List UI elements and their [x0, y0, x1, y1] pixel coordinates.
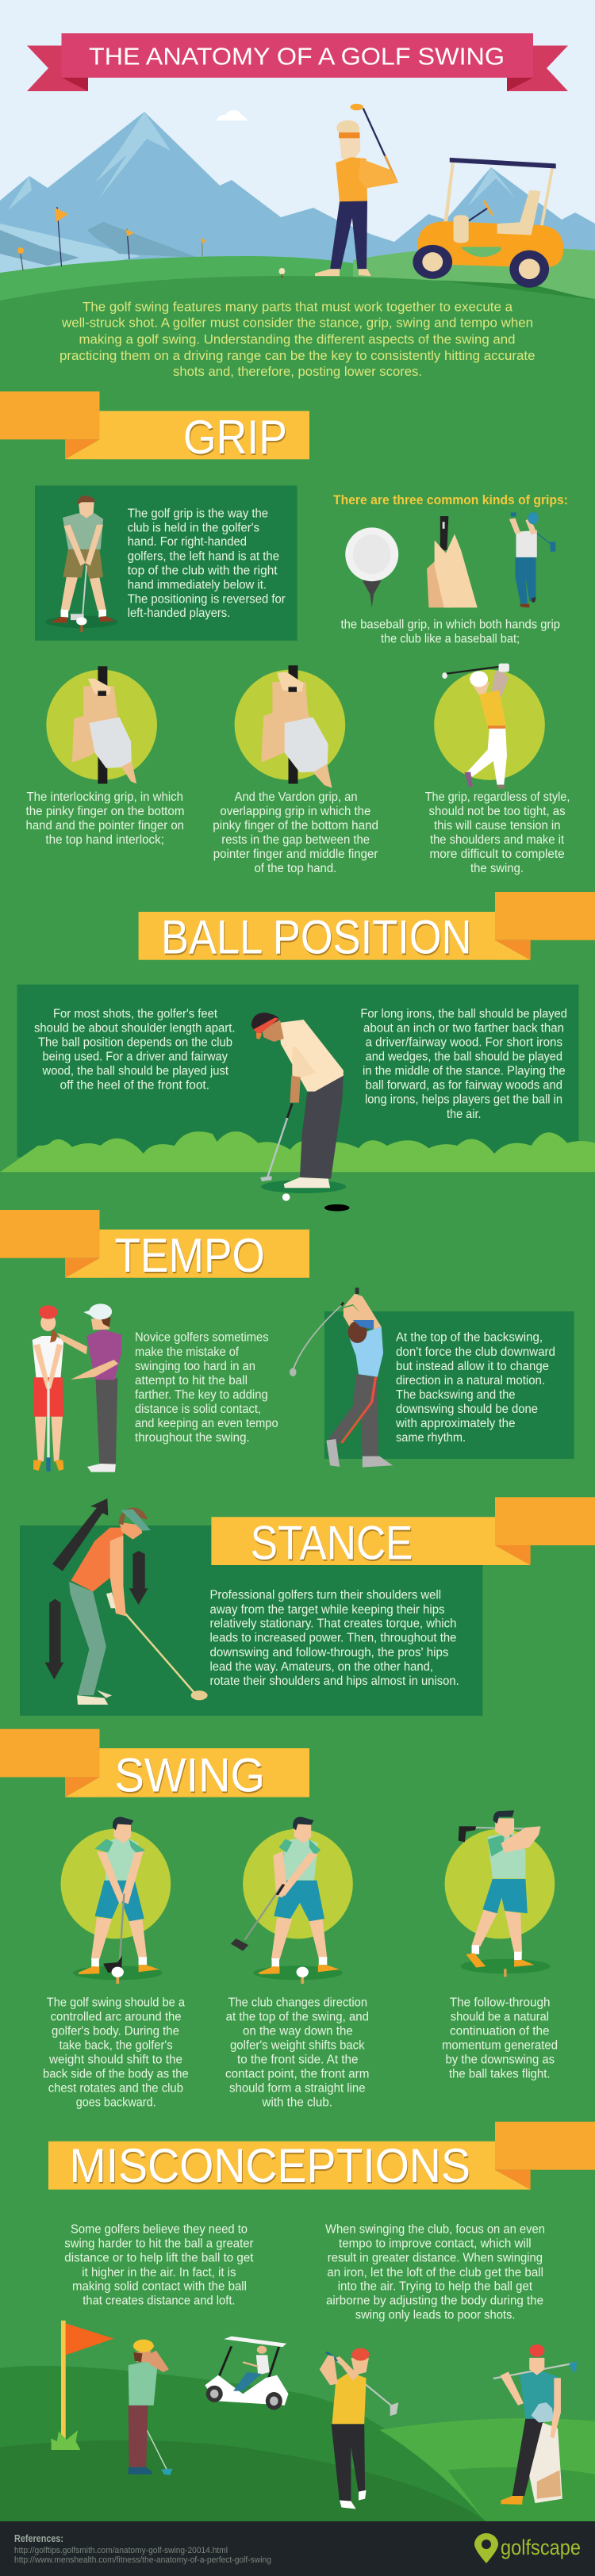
panel: tempo backswing: [324, 1311, 574, 1459]
text: misconceptions right: tempo to improve contact, which will: [339, 2237, 532, 2250]
text: swing stage 1: take back, the golfer's: [60, 2039, 173, 2053]
text: misconceptions right: into the air. Trying to help the ball get: [338, 2280, 533, 2294]
illustration: golfer at top of backswing: [290, 1288, 393, 1468]
text: misconceptions left: [64, 2222, 254, 2308]
text: interlocking grip: hand and the pointer finger on: [25, 819, 184, 833]
text: ball position left: [34, 1007, 235, 1093]
text: grip tension: more difficult to complete: [430, 848, 565, 861]
illustration: instructor and student: [33, 1303, 121, 1472]
text: tempo left: make the mistake of: [135, 1345, 240, 1359]
text: ball position right: ball forward, as for fairway woods and: [366, 1079, 562, 1093]
text: swing stage 1: controlled arc around the: [51, 2011, 182, 2024]
section header: stance: STANCE: [251, 1517, 413, 1570]
text: grip tension: the swing.: [470, 862, 524, 875]
text: swing stage 3: the ball takes flight.: [449, 2068, 551, 2081]
text: ball position left: wood, the ball should be played just: [42, 1065, 229, 1078]
text: tempo right: At the top of the backswing,: [396, 1331, 543, 1345]
grip definition text: The golf grip is the way the: [128, 507, 268, 520]
text: misconceptions right: result in greater distance. When swinging: [328, 2252, 543, 2265]
section header: tempo: TEMPO: [114, 1229, 265, 1282]
grip definition text: [128, 507, 286, 620]
text: ball position right: and wedges, the ball should be played: [366, 1051, 562, 1064]
text: misconceptions right: When swinging the club, focus on an even: [325, 2222, 545, 2236]
text: tempo left: and keeping an even tempo: [135, 1417, 278, 1430]
arrow: shoulder turn: [52, 1499, 108, 1571]
text: Vardon grip: rests in the gap between the: [221, 833, 370, 847]
text: misconceptions left: Some golfers believe they need to: [71, 2222, 248, 2236]
text: tempo right: [395, 1331, 555, 1445]
references: References:: [14, 2532, 63, 2544]
text: ball position right: the air.: [447, 1108, 481, 1121]
text: swing stage 1: The golf swing should be a: [47, 1996, 185, 2010]
section header: tempo: [0, 1210, 309, 1282]
text: misconceptions right: an iron, let the loft of the club get the ball: [327, 2266, 543, 2279]
text: ball position left: The ball position depends on the club: [38, 1035, 232, 1049]
text: stance: downswing and follow-through, the pros' hips: [209, 1646, 449, 1659]
text: tempo left: [135, 1331, 278, 1445]
text: swing stage 3: [442, 1996, 558, 2081]
text: swing stage 2: [225, 1996, 369, 2110]
text: swing stage 3: should be a natural: [451, 2011, 549, 2024]
text: tempo right: don't force the club downward: [396, 1345, 555, 1359]
illustration: swing stage 1 takeaway: [61, 1817, 171, 1984]
text: misconceptions left: making solid contact with the ball: [72, 2280, 247, 2294]
text: swing stage 2: to the front side. At the: [237, 2054, 359, 2067]
cloud: [217, 110, 248, 121]
intro text: The golf swing features many parts that must work together to execute a: [83, 299, 513, 314]
footer: [0, 2521, 595, 2576]
text: swing stage 2: The club changes direction: [228, 1996, 367, 2010]
text: grip tension: the shoulders and make it: [430, 833, 565, 847]
text: stance: rotate their shoulders and hips almost in unison.: [209, 1675, 459, 1688]
text: ball position right: in the middle of the stance. Playing the: [363, 1065, 566, 1078]
text: swing stage 2: golfer's weight shifts back: [230, 2039, 365, 2053]
text: tempo left: swinging too hard in an: [135, 1360, 255, 1373]
text: tempo left: throughout the swing.: [135, 1431, 250, 1445]
illustration: interlocking grip: [46, 666, 157, 784]
text: Vardon grip: [213, 790, 378, 875]
logo: golfscape: golfscape: [501, 2536, 581, 2559]
panel: grip definition: [35, 485, 297, 641]
illustration: putting golfer, ball and hole: [251, 1012, 350, 1211]
grip definition text: club is held in the golfer's: [128, 521, 259, 534]
text: Vardon grip: of the top hand.: [254, 862, 336, 875]
section header: swing: [0, 1729, 309, 1801]
text: ball position left: For most shots, the golfer's feet: [53, 1007, 218, 1020]
intro text: making a golf swing. Understanding the different aspects of the swing and: [79, 331, 516, 346]
text: Vardon grip: overlapping grip in which the: [220, 805, 370, 818]
illustration: golfer in yellow finishing backswing: [320, 2348, 398, 2509]
intro text: practicing them on a driving range can be the key to consistently hitting accurate: [60, 348, 535, 363]
text: tempo right: The backswing and the: [396, 1388, 516, 1402]
icon: baseball grip hand: [427, 516, 478, 607]
text: baseball grip: the baseball grip, in which both hands grip: [341, 618, 560, 631]
text: misconceptions left: it higher in the air. In fact, it is: [82, 2266, 236, 2279]
icon: small golfer in blue: [509, 512, 555, 607]
references: [14, 2532, 271, 2565]
section header: stance: [211, 1497, 595, 1570]
text: tempo right: same rhythm.: [396, 1431, 466, 1445]
illustration: golfer follow-through in yellow: [434, 664, 545, 789]
text: grip tension: this will cause tension in: [434, 819, 560, 833]
text: stance: [209, 1589, 459, 1688]
illustration: golfer addressing ball: [45, 496, 117, 632]
text: baseball grip: [341, 618, 560, 646]
text: tempo left: attempt to hit the ball: [135, 1374, 248, 1388]
hero scene: sky, mountains, hills: [0, 0, 595, 333]
text: ball position left: off the heel of the front foot.: [60, 1079, 209, 1093]
text: tempo right: with approximately the: [395, 1417, 516, 1430]
title ribbon: [27, 33, 568, 91]
text: Vardon grip: pinky finger of the bottom hand: [213, 819, 378, 833]
hills: closing scene: [0, 2366, 595, 2521]
text: ball position left: should be about shoulder length apart.: [34, 1022, 235, 1035]
text: grip tension: should not be too tight, as: [428, 805, 566, 818]
text: swing stage 1: chest rotates and the club: [48, 2082, 183, 2096]
references: http://golftips.golfsmith.com/anatomy-golf-swing-20014.html: [14, 2546, 228, 2555]
text: misconceptions right: swing only leads to poor shots.: [355, 2309, 516, 2321]
text: ball position right: a driver/fairway wood. For short irons: [366, 1035, 562, 1049]
intro text: well-struck shot. A golfer must consider the stance, grip, swing and tempo when: [61, 316, 533, 331]
icon: golf ball on tee: [345, 527, 398, 607]
text: swing stage 2: with the club.: [262, 2096, 332, 2110]
text: misconceptions left: swing harder to hit the ball a greater: [64, 2237, 254, 2250]
text: stance: away from the target while keeping their hips: [209, 1603, 445, 1617]
text: swing stage 2: contact point, the front arm: [225, 2068, 369, 2081]
text: stance: leads to increased power. Then, throughout the: [209, 1632, 456, 1645]
text: tempo left: farther. The key to adding: [135, 1388, 268, 1402]
text: baseball grip: the club like a baseball bat;: [381, 633, 520, 646]
icon: pin flag: [52, 2321, 113, 2450]
grip definition text: top of the club with the right: [128, 564, 278, 577]
section header: misconceptions: MISCONCEPTIONS: [70, 2139, 470, 2192]
text: stance: lead the way. Amateurs, on the other hand,: [209, 1660, 433, 1674]
bushes: [0, 1131, 595, 1172]
illustration: stance golfer with motion arrows: [44, 1499, 208, 1705]
grip definition text: The positioning is reversed for: [128, 592, 286, 606]
subheading: three kinds of grips: There are three common kinds of grips:: [333, 492, 568, 507]
text: stance: relatively stationary. That creates torque, which: [209, 1617, 456, 1631]
text: stance: Professional golfers turn their shoulders well: [209, 1589, 441, 1602]
text: tempo right: direction in a natural motion.: [396, 1374, 545, 1388]
panel: ball position: [0, 985, 595, 1172]
text: ball position left: being used. For a driver and fairway: [43, 1051, 228, 1064]
section header: grip: GRIP: [183, 411, 287, 464]
text: tempo right: downswing should be done: [396, 1403, 538, 1416]
text: interlocking grip: the pinky finger on the bottom: [25, 805, 184, 818]
text: ball position right: about an inch or two farther back than: [363, 1022, 564, 1035]
illustration: golfer with club bag: [493, 2344, 577, 2505]
illustration: swing stage 2 downswing: [231, 1817, 353, 1984]
text: misconceptions left: distance or to help lift the ball to get: [64, 2252, 254, 2265]
text: swing stage 3: The follow-through: [450, 1996, 551, 2010]
text: Vardon grip: pointer finger and middle finger: [213, 848, 378, 861]
text: Vardon grip: And the Vardon grip, an: [235, 790, 358, 804]
illustration: small golf cart with driver: [205, 2337, 289, 2410]
text: swing stage 1: weight should shift to the: [48, 2054, 182, 2067]
section header: swing: SWING: [114, 1748, 265, 1801]
text: swing stage 3: by the downswing as: [446, 2054, 555, 2067]
text: swing stage 1: goes backward.: [76, 2096, 156, 2110]
grip definition text: hand immediately below it.: [128, 579, 267, 591]
grip definition text: golfers, the left hand is at the: [128, 549, 279, 563]
intro text: [60, 299, 535, 379]
references: http://www.menshealth.com/fitness/the-anatomy-of-a-perfect-golf-swing: [14, 2555, 271, 2565]
arrow: down right: [129, 1551, 148, 1605]
panel: stance: [20, 1525, 482, 1716]
text: misconceptions left: that creates distance and loft.: [83, 2295, 235, 2308]
text: swing stage 2: on the way down the: [243, 2025, 353, 2038]
text: grip tension: The grip, regardless of style,: [425, 790, 570, 804]
text: swing stage 1: [43, 1996, 189, 2110]
text: grip tension: [425, 790, 570, 875]
illustration: swing stage 3 follow-through: [445, 1810, 555, 1977]
text: tempo left: Novice golfers sometimes: [135, 1331, 269, 1345]
section header: ball position: BALL POSITION: [161, 911, 471, 964]
text: swing stage 1: back side of the body as the: [43, 2068, 189, 2081]
illustration: golf cart: [413, 158, 595, 300]
text: tempo right: but instead allow it to change: [396, 1360, 549, 1373]
text: interlocking grip: [25, 790, 184, 847]
grip definition text: hand. For right-handed: [128, 535, 247, 549]
text: swing stage 2: at the top of the swing, and: [226, 2011, 369, 2024]
text: misconceptions right: [325, 2222, 545, 2321]
text: interlocking grip: the top hand interlock;: [45, 833, 164, 847]
arrow: down left: [44, 1599, 63, 1679]
illustration: golfer shading eyes: [129, 2340, 173, 2475]
grip definition text: left-handed players.: [128, 607, 230, 620]
text: swing stage 3: continuation of the: [450, 2025, 550, 2038]
text: swing stage 3: momentum generated: [442, 2039, 558, 2053]
title: THE ANATOMY OF A GOLF SWING: [89, 43, 505, 70]
section header: ball position: [139, 892, 595, 964]
section header: grip: [0, 392, 309, 464]
icons: course flags: [17, 207, 206, 270]
intro text: shots and, therefore, posting lower scores.: [173, 364, 422, 379]
text: tempo left: distance is solid contact,: [135, 1403, 261, 1416]
illustration: hero golfer: [279, 104, 398, 278]
illustration: Vardon grip: [235, 665, 345, 788]
text: interlocking grip: The interlocking grip, in which: [27, 790, 183, 804]
text: misconceptions right: airborne by adjusting the body during the: [326, 2295, 543, 2308]
logo: golfscape: [474, 2533, 581, 2563]
text: ball position right: [360, 1007, 567, 1121]
text: swing stage 1: golfer's body. During the: [52, 2025, 179, 2038]
text: ball position right: long irons, helps players get the ball in: [365, 1093, 562, 1107]
section header: misconceptions: [48, 2122, 595, 2192]
text: ball position right: For long irons, the ball should be played: [360, 1007, 567, 1020]
text: swing stage 2: should form a straight line: [229, 2082, 366, 2096]
